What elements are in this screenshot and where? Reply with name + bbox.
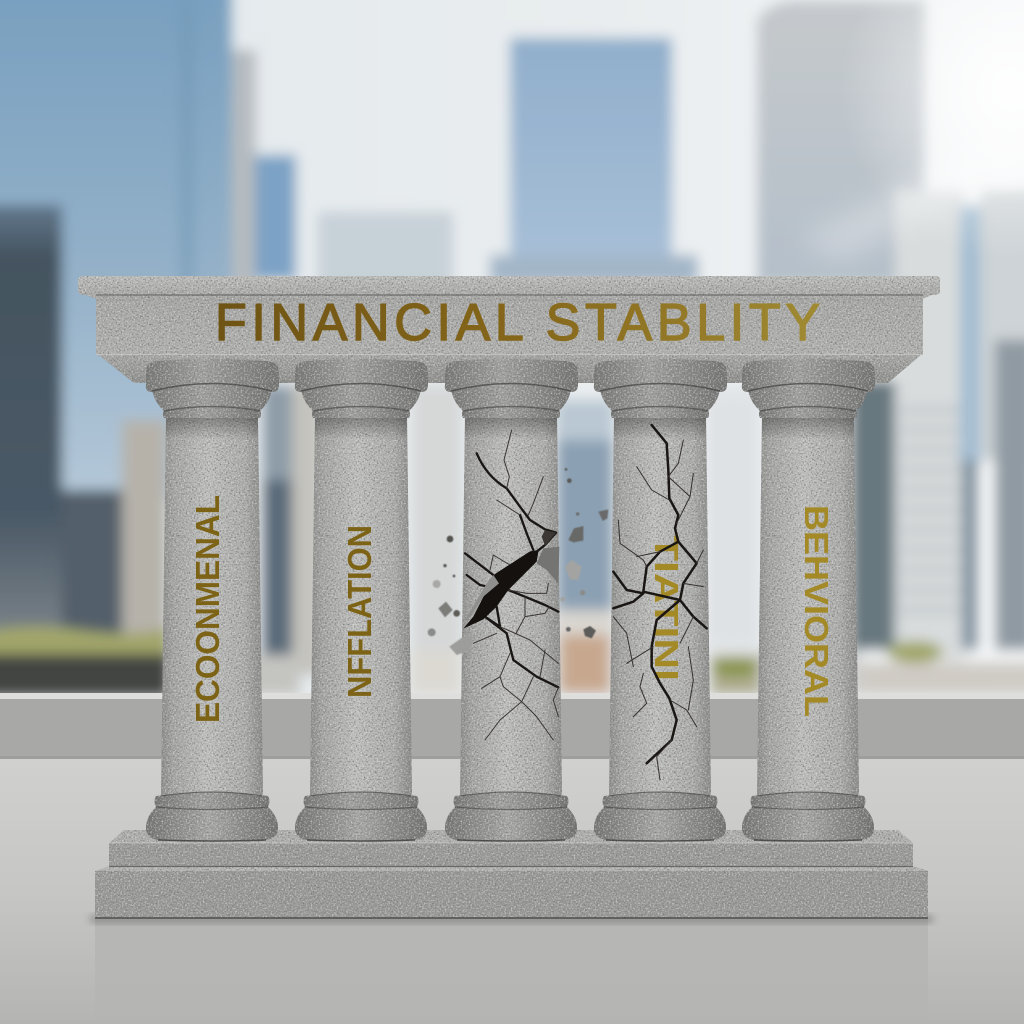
column 5: Behavioral — [742, 359, 875, 841]
lower step top — [95, 866, 928, 871]
sun glare — [800, 0, 1024, 260]
title: Financial Stablity: FINANCIAL STABLITY — [215, 294, 820, 352]
upper step top — [109, 830, 913, 843]
lower chamfer — [97, 354, 922, 383]
upper step face — [109, 843, 913, 867]
column 3: cracked with hole — [428, 359, 608, 841]
crack network — [613, 425, 707, 780]
column 2: Inflation — [295, 359, 428, 841]
tall blue tower left — [0, 0, 232, 500]
cracks and broken chunk — [463, 430, 559, 740]
column 1: Economic — [146, 359, 279, 841]
column 4: cracked — [594, 359, 727, 841]
lower left buildings — [60, 490, 125, 640]
background: blurred city skyline — [0, 0, 1024, 700]
entablature — [78, 276, 940, 383]
lower step face — [95, 871, 928, 918]
label: Ecoonmenal: ECOONMENAL — [189, 495, 226, 723]
central blue tower — [510, 38, 672, 278]
label: Tiatini: TIATINI — [648, 535, 685, 681]
terrace wall — [0, 693, 1024, 759]
stepped plinth — [95, 830, 928, 918]
middle grey building — [318, 212, 453, 292]
right pale tower — [757, 0, 925, 285]
label: Behvioral: BEHVIORAL — [798, 505, 835, 717]
concrete floor — [0, 759, 1024, 1024]
label fragments flying — [428, 468, 608, 655]
ground line city base — [0, 648, 170, 698]
label: Nfflation: NFFLATION — [341, 525, 378, 698]
top slab — [78, 276, 940, 299]
frieze block — [96, 293, 923, 355]
